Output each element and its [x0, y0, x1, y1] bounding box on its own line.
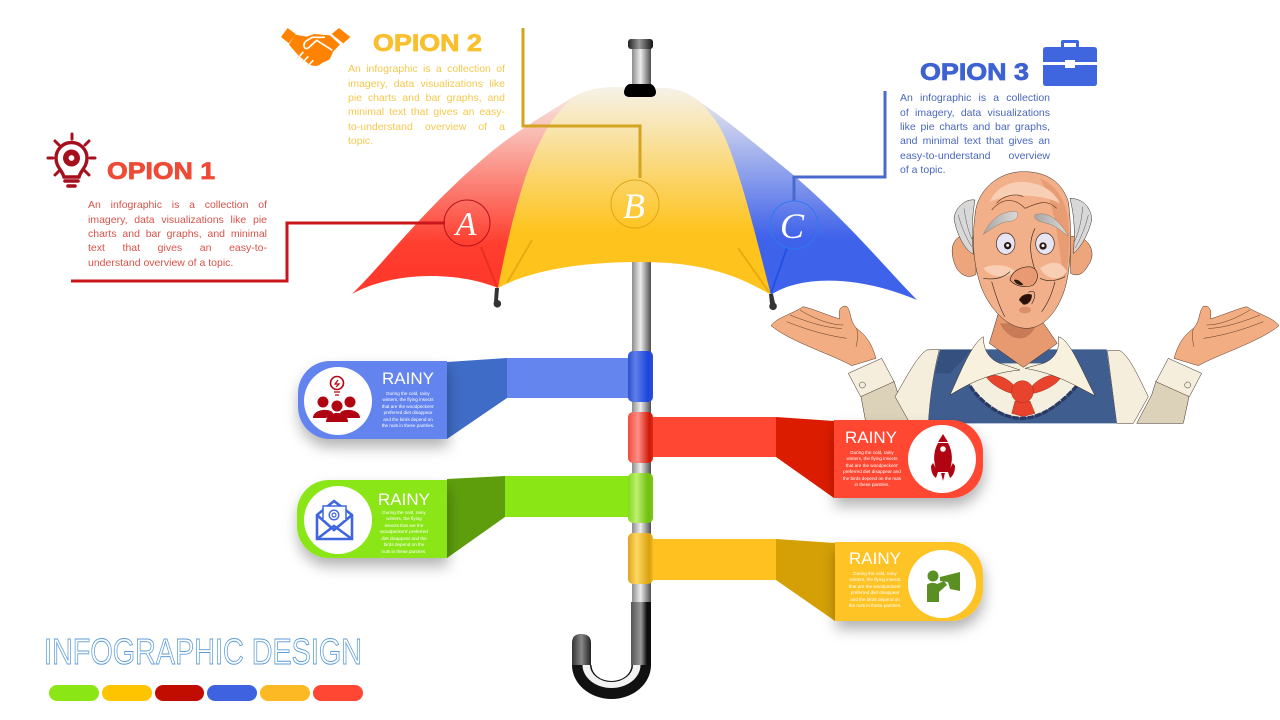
description: that are the woodpeckers'	[846, 463, 898, 468]
text: option 2 body: An infographic is a collection of	[348, 63, 505, 75]
description: nuts in these pantries.	[382, 549, 426, 554]
description: During the cold, rainy	[386, 391, 430, 396]
label: RAINY	[382, 369, 434, 388]
fold	[776, 417, 834, 498]
yellow tab: rainy card	[650, 539, 983, 621]
badge C: C	[780, 206, 805, 246]
colour pills	[49, 685, 363, 701]
description: preferred diet disappear	[851, 590, 900, 595]
text: option 1 body: text that gives an easy-to-	[88, 242, 267, 254]
description: winters, the flying	[386, 516, 422, 521]
heading: OPION 1: OPION 1	[107, 158, 215, 185]
badge A	[444, 200, 490, 246]
description	[380, 510, 428, 554]
umbrella handle	[572, 602, 651, 699]
text: option 2 body: topic.	[348, 135, 373, 147]
fold	[447, 476, 505, 558]
card	[834, 420, 983, 498]
description: During the cold, rainy	[382, 510, 426, 515]
icon circle	[304, 367, 372, 435]
description: winters, the flying insects	[846, 456, 898, 461]
description: that are the woodpeckers'	[382, 404, 434, 409]
text: option 1 body: understand overview of a topic.	[88, 257, 233, 269]
badge B	[611, 180, 659, 228]
blue tab: rainy card	[298, 358, 630, 439]
arms and hands	[771, 306, 1279, 423]
green tab: rainy card	[297, 476, 630, 558]
description: diet disappear and the	[381, 536, 427, 541]
icon: handshake	[281, 28, 350, 66]
text: option 3 body: easy-to-understand overview	[900, 150, 1050, 162]
description	[382, 391, 434, 428]
description: preferred diet disappear and	[843, 469, 901, 474]
text: option 3 body: like pie charts and bar graphs,	[900, 121, 1050, 133]
canopy tip right	[769, 294, 777, 310]
description: that are the woodpeckers'	[849, 584, 901, 589]
badge C	[770, 201, 818, 249]
fold	[447, 358, 507, 439]
icon: rocket	[931, 434, 955, 481]
text: option 3 body: of a topic.	[900, 164, 946, 176]
text: option 3 body	[900, 92, 1050, 176]
canopy panel: yellow	[498, 87, 771, 295]
card	[298, 361, 447, 439]
connector line: option 1	[71, 223, 445, 281]
title: INFOGRAPHIC DESIGN	[44, 631, 362, 672]
description: woodpeckers' preferred	[380, 529, 428, 534]
icon: team with bulb	[313, 376, 360, 422]
strip	[507, 358, 630, 398]
description: the nuts in these pantries.	[849, 603, 901, 608]
heading: OPION 3: OPION 3	[920, 59, 1029, 86]
heading: OPION 2: OPION 2	[373, 30, 482, 57]
icon: bulb with gear	[48, 134, 95, 186]
text: option 2 body: to-understand overview of a	[348, 121, 505, 133]
description: winters, the flying insects	[382, 397, 434, 402]
description: During the cold, rainy	[850, 450, 894, 455]
strip	[505, 476, 630, 517]
text: option 3 body: An infographic is a collection	[900, 92, 1050, 104]
head	[952, 172, 1092, 328]
label: RAINY	[845, 428, 897, 447]
description: winters, the flying insects	[849, 577, 901, 582]
connector line: option 3	[794, 91, 885, 201]
text: option 1 body: charts and bar graphs, and minimal	[88, 228, 267, 240]
description: insects that are the	[385, 523, 424, 528]
icon circle	[908, 425, 976, 493]
canopy panel: blue	[670, 97, 917, 300]
icon: person with megaphone	[927, 570, 960, 602]
description	[843, 450, 902, 487]
text: option 3 body: of imagery, data visualizations	[900, 107, 1050, 119]
canopy panel: red	[352, 97, 610, 294]
torso with vest and tie	[895, 313, 1148, 423]
text: option 2 body: pie charts and bar graphs, and	[348, 92, 505, 104]
icon: briefcase	[1043, 40, 1097, 86]
text: option 2 body: minimal text that gives an easy-	[348, 106, 505, 118]
text: option 1 body: imagery, data visualizations like pie	[88, 214, 267, 226]
description: birds depend on the	[384, 542, 425, 547]
pole sleeves	[628, 351, 653, 584]
text: option 1 body: An infographic is a collection of	[88, 199, 267, 211]
icon circle	[908, 550, 976, 618]
cartoon old man	[771, 172, 1279, 423]
fold	[776, 539, 835, 621]
canopy ribs	[481, 240, 787, 293]
description: in these pantries.	[854, 482, 890, 487]
description: and the birds depend on	[850, 597, 900, 602]
canopy top cap	[624, 84, 656, 97]
description	[849, 571, 901, 608]
label: RAINY	[849, 549, 901, 568]
text: option 1 body	[88, 199, 268, 269]
description: During the cold, rainy	[853, 571, 897, 576]
card	[835, 542, 983, 621]
red tab: rainy card	[650, 417, 983, 498]
connector line: option 2	[523, 28, 640, 178]
icon: open envelope	[317, 501, 352, 539]
text: option 2 body	[348, 63, 506, 147]
text: option 3 body: and minimal text that gives an	[900, 135, 1050, 147]
canopy tip left	[494, 288, 501, 308]
strip	[650, 417, 776, 457]
strip	[650, 539, 776, 580]
label: RAINY	[378, 490, 430, 509]
description: the birds depend on the nuts	[843, 476, 902, 481]
description: and the birds depend on	[383, 417, 433, 422]
icon circle	[304, 486, 372, 554]
badge A: A	[454, 206, 477, 243]
umbrella canopy	[352, 84, 917, 310]
text: option 2 body: imagery, data visualizations like	[348, 78, 505, 90]
badge B: B	[623, 186, 645, 226]
card	[297, 480, 447, 558]
umbrella pole	[628, 39, 653, 605]
description: the nuts in these pantries.	[382, 423, 434, 428]
description: preferred diet disappear	[384, 410, 433, 415]
